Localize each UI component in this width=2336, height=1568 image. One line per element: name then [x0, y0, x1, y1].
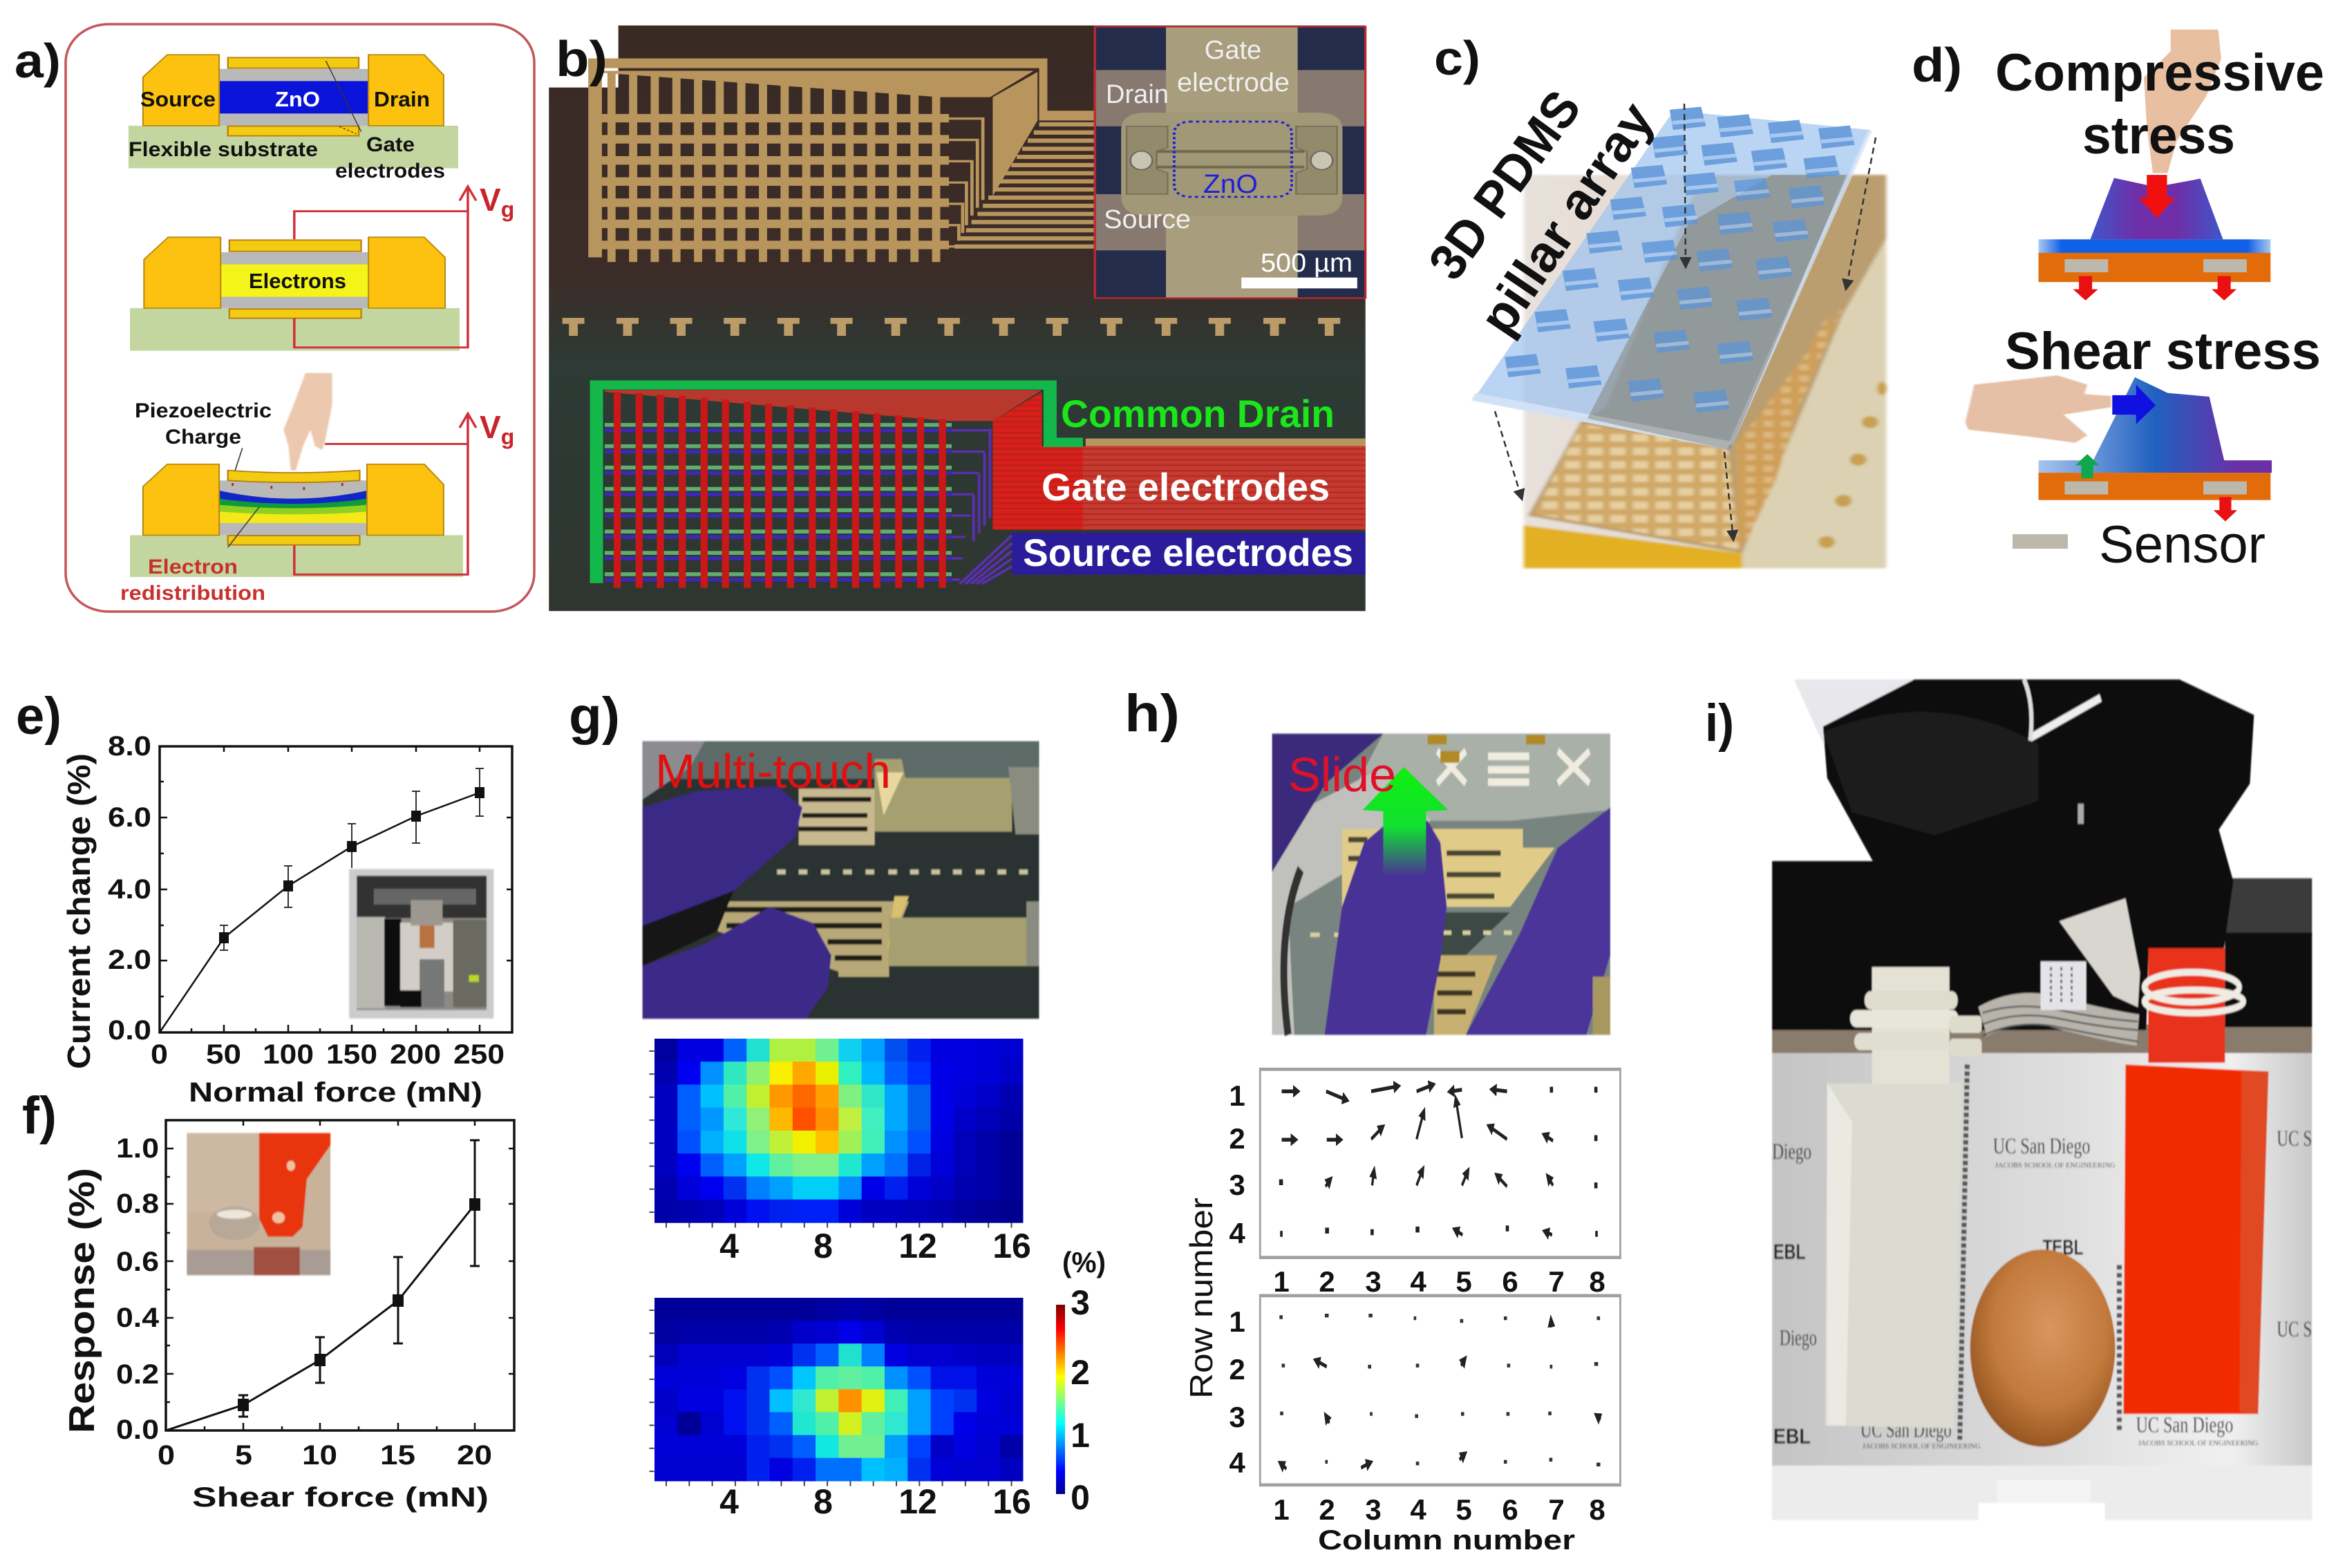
shear stress diagram	[1966, 375, 2272, 522]
rounded red frame	[66, 24, 534, 612]
axis tick labels: 0	[151, 1039, 168, 1070]
transistor schematic 3 with finger press	[120, 373, 514, 605]
green slide direction arrow	[1363, 767, 1449, 876]
transistor schematic 1: ZnO	[275, 87, 320, 111]
panel b label: b)	[556, 32, 607, 87]
row tick labels: 3	[1229, 1401, 1245, 1433]
row tick labels: 2	[1229, 1122, 1245, 1155]
column tick labels bottom: 7	[1548, 1493, 1565, 1526]
heatmap 1 axis ticks and labels	[652, 1050, 1031, 1265]
multi-touch photo	[643, 742, 1039, 1019]
labels on the colourised array: Gate electrodes	[1042, 465, 1330, 509]
axis tick labels	[116, 1133, 492, 1471]
inset: shear force test photo	[187, 1133, 330, 1275]
gripper photo: Diego	[1780, 1325, 1817, 1351]
gripper photo: UC San Diego	[1861, 1417, 1952, 1442]
heatmap 1 axis ticks and labels: 12	[898, 1227, 937, 1265]
vector map 2	[1260, 1296, 1620, 1485]
heatmap 2 axis ticks and labels: 16	[992, 1482, 1031, 1521]
transistor schematic 2: Electrons	[249, 269, 346, 293]
column number axis title: Column number	[1318, 1525, 1575, 1556]
axis tick labels: 5	[235, 1440, 252, 1471]
gripper photo: JACOBS SCHOOL OF ENGINEERING	[1995, 1161, 2115, 1169]
transistor schematic 3 with finger press: g	[501, 424, 514, 449]
axis tick labels: 10	[302, 1440, 337, 1471]
rotated label: 3D PDMS pillar array: 3D PDMS	[1417, 80, 1592, 290]
gripper text on backdrop: UC San Diego	[1993, 1133, 2091, 1159]
axis tick labels: 200	[390, 1039, 441, 1070]
heatmap 1	[654, 1039, 1023, 1223]
transistor schematic 2: g	[501, 197, 514, 222]
column tick labels bottom: 5	[1456, 1493, 1472, 1526]
column tick labels bottom: 2	[1319, 1493, 1335, 1526]
panel g: multi-touch mapping	[569, 687, 1106, 1521]
inset: single transistor micrograph: Gate	[1205, 36, 1261, 65]
labels on the colourised array	[1023, 392, 1353, 574]
dashed alignment arrows	[1495, 104, 1876, 540]
colour bar with scale labels	[1056, 1246, 1106, 1517]
slide gesture photo	[1272, 734, 1610, 1035]
panel h label: h)	[1124, 684, 1180, 743]
column tick labels top: 6	[1502, 1265, 1518, 1298]
bottom fixture	[1997, 1480, 2091, 1503]
axis tick labels: 0.0	[108, 1015, 151, 1046]
red bottle gripper	[2148, 948, 2225, 1063]
column tick labels top: 5	[1456, 1265, 1472, 1298]
row tick labels: 4	[1229, 1217, 1245, 1249]
vector map 1	[1260, 1069, 1620, 1258]
transistor schematic 2	[130, 182, 514, 350]
panel f: response vs shear force chart	[22, 1086, 514, 1513]
row number axis title: Row number	[1183, 1198, 1219, 1399]
transistor schematic 1: Gate	[366, 133, 415, 156]
gripper photo: EBL	[1773, 1424, 1811, 1448]
panel e label: e)	[16, 687, 62, 746]
panel c label: c)	[1434, 31, 1480, 85]
sensor legend: Sensor	[2099, 516, 2266, 574]
panel e: current change vs normal force chart	[16, 687, 512, 1108]
heatmap 2 axis ticks and labels: 4	[719, 1482, 739, 1521]
column tick labels top: 4	[1410, 1265, 1426, 1298]
inset: single transistor micrograph	[1094, 26, 1366, 298]
row tick labels: 3	[1229, 1169, 1245, 1201]
heading: compressive stress	[1995, 44, 2324, 165]
gripper photo: JACOBS SCHOOL OF ENGINEERING	[2138, 1439, 2258, 1447]
axis tick labels: 20	[457, 1440, 492, 1471]
axis tick labels: 0	[158, 1440, 175, 1471]
axes frame and ticks	[160, 746, 512, 1032]
colour bar with scale labels: 0	[1071, 1478, 1090, 1517]
gripper photo: UC S	[2277, 1126, 2312, 1151]
labels on the colourised array: Source electrodes	[1023, 531, 1353, 574]
transistor schematic 3 with finger press: Piezoelectric	[135, 399, 272, 422]
row tick labels: 4	[1229, 1446, 1245, 1479]
gold electrode array (top)	[588, 59, 1094, 262]
column tick labels bottom: 8	[1589, 1493, 1605, 1526]
heatmap 2 axis ticks and labels: 8	[813, 1482, 833, 1521]
axis tick labels: 2.0	[108, 945, 151, 975]
slide caption: Slide	[1288, 748, 1396, 802]
transistor schematic 1: Drain	[374, 87, 430, 111]
y axis title: Current change (%)	[61, 753, 97, 1069]
axis tick labels: 50	[206, 1039, 241, 1070]
inset: single transistor micrograph: Drain	[1106, 80, 1169, 109]
axis tick labels: 0.8	[116, 1189, 159, 1219]
axis tick labels: 250	[453, 1039, 505, 1070]
column tick labels top	[1273, 1265, 1605, 1298]
colourised electrode array (bottom)	[596, 385, 1366, 588]
heatmap 1 axis ticks and labels: 8	[813, 1227, 833, 1265]
heatmap 2	[654, 1298, 1023, 1481]
panel c: 3D PDMS pillar array	[1417, 31, 1887, 568]
heatmap 2 axis ticks and labels	[652, 1310, 1031, 1521]
labels on the colourised array: Common Drain	[1061, 392, 1335, 435]
inset: single transistor micrograph: ZnO	[1203, 170, 1258, 199]
panel a label: a)	[15, 34, 61, 88]
heatmap 1 axis ticks and labels: 16	[992, 1227, 1031, 1265]
axis tick labels: 0.4	[116, 1303, 160, 1333]
sensor legend	[2013, 516, 2266, 574]
transistor schematic 3 with finger press: V	[480, 409, 501, 445]
blue PDMS sheet with pillars	[1473, 106, 1870, 451]
transistor schematic 3 with finger press: Electron	[148, 556, 238, 578]
column tick labels bottom: 1	[1273, 1493, 1290, 1526]
gripper photo: Diego	[1772, 1140, 1811, 1164]
photo backdrop	[1772, 1030, 2312, 1520]
panel f label: f)	[22, 1086, 57, 1145]
column tick labels top: 8	[1589, 1265, 1605, 1298]
row tick labels: 1	[1229, 1079, 1245, 1112]
transistor schematic 1: Flexible substrate	[129, 138, 318, 161]
column tick labels bottom	[1273, 1493, 1605, 1526]
axis tick labels: 0.6	[116, 1247, 159, 1277]
heading: compressive stress: Compressive	[1995, 44, 2324, 102]
axis tick labels: 15	[380, 1440, 415, 1471]
x axis title: Shear force (mN)	[192, 1482, 489, 1513]
inset: normal force test photo	[349, 869, 493, 1019]
panel a: ZnO transistor working principle	[15, 24, 534, 612]
axis tick labels: 150	[326, 1039, 377, 1070]
multi-touch caption: Multi-touch	[655, 744, 891, 798]
colour bar with scale labels: 2	[1071, 1353, 1090, 1392]
gripper photo: EBL	[1773, 1240, 1806, 1264]
panel i label: i)	[1705, 694, 1734, 753]
column tick labels top: 7	[1548, 1265, 1565, 1298]
column tick labels top: 1	[1273, 1265, 1290, 1298]
panel h: slide sensing vector maps	[1124, 684, 1620, 1556]
axis tick labels: 0.0	[116, 1415, 159, 1445]
white bottle gripper	[1872, 967, 1950, 1084]
column tick labels bottom: 3	[1365, 1493, 1382, 1526]
inset: single transistor micrograph: Source	[1104, 205, 1191, 234]
heading: compressive stress: stress	[2082, 106, 2235, 165]
heatmap 2 axis ticks and labels: 12	[898, 1482, 937, 1521]
micrograph background	[549, 26, 1366, 611]
panel g label: g)	[569, 687, 620, 746]
gripper photo: JACOBS SCHOOL OF ENGINEERING	[1863, 1442, 1981, 1450]
transistor schematic 1: Source	[140, 87, 216, 111]
heading: shear stress: Shear stress	[2005, 322, 2321, 381]
transistor schematic 1	[129, 55, 458, 182]
transistor schematic 1: electrodes	[335, 160, 445, 182]
x axis title: Normal force (mN)	[189, 1077, 482, 1108]
data line, markers and error bars	[160, 768, 484, 1032]
inset: single transistor micrograph: electrode	[1177, 68, 1290, 97]
axes frame and ticks	[166, 1120, 514, 1430]
ribbon cables and connector	[1983, 1009, 2138, 1030]
row tick labels: 2	[1229, 1353, 1245, 1386]
rotated label: 3D PDMS pillar array: pillar array	[1468, 92, 1665, 345]
y axis title: Response (%)	[62, 1168, 102, 1433]
compressive stress diagram	[2039, 30, 2270, 301]
column tick labels top: 3	[1365, 1265, 1382, 1298]
transistor schematic 3 with finger press: Charge	[165, 426, 241, 448]
row tick labels: 1	[1229, 1305, 1245, 1338]
panel d label: d)	[1912, 38, 1962, 92]
gripper photo: UC S	[2277, 1317, 2312, 1342]
inset: single transistor micrograph: 500 µm	[1261, 249, 1353, 278]
transistor schematic 2: V	[480, 182, 501, 218]
axis tick labels: 1.0	[116, 1133, 159, 1164]
row tick labels	[1229, 1079, 1245, 1479]
column tick labels bottom: 6	[1502, 1493, 1518, 1526]
column tick labels bottom: 4	[1410, 1493, 1426, 1526]
gripper photo	[1772, 679, 2312, 1520]
egg	[1970, 1249, 2115, 1446]
panel b: electrode array micrograph	[549, 26, 1366, 611]
gripper photo: UC San Diego	[2136, 1413, 2233, 1438]
axis tick labels: 6.0	[108, 802, 151, 833]
colour bar with scale labels: 1	[1071, 1416, 1090, 1455]
column tick labels top: 2	[1319, 1265, 1335, 1298]
gripper photo: TEBL	[2043, 1235, 2083, 1260]
axis tick labels: 4.0	[108, 874, 151, 905]
axis tick labels: 100	[263, 1039, 314, 1070]
heatmap 1 axis ticks and labels: 4	[719, 1227, 739, 1265]
axis tick labels	[108, 731, 505, 1070]
colour bar with scale labels: 3	[1071, 1283, 1090, 1322]
photo of electrode array	[1524, 175, 1887, 568]
axis tick labels: 8.0	[108, 731, 151, 762]
colour bar with scale labels: (%)	[1062, 1246, 1106, 1278]
panel d: stress schematics	[1912, 30, 2324, 574]
panel i: gripper holding an egg	[1705, 679, 2312, 1520]
transistor schematic 3 with finger press: redistribution	[120, 582, 265, 605]
sensor strips	[1960, 1064, 1967, 1439]
row of gold contact pads	[563, 318, 1340, 336]
data line, markers and error bars	[166, 1140, 480, 1430]
axis tick labels: 0.2	[116, 1359, 159, 1390]
